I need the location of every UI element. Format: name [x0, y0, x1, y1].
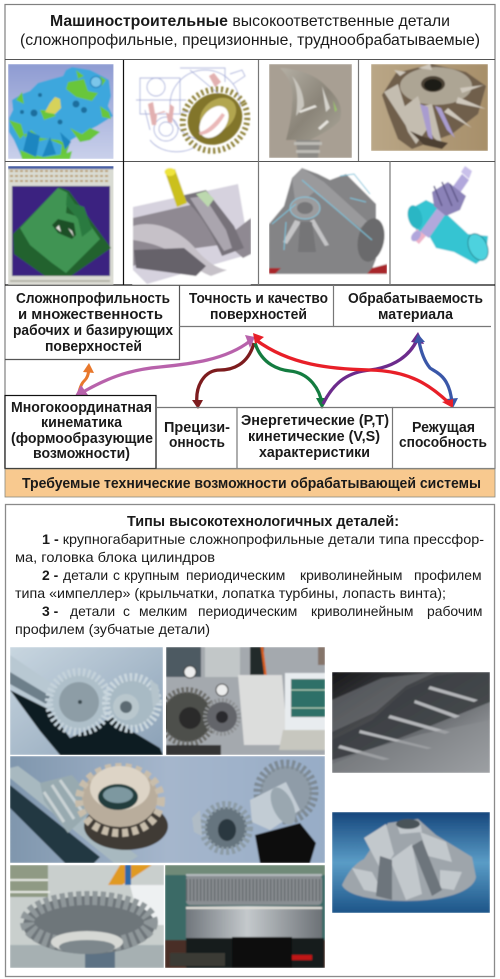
- text block: type descriptions: криволинейным: [300, 567, 402, 583]
- image: screw rotor with yellow tool: [132, 167, 251, 285]
- text box: machinability: [334, 291, 491, 326]
- text box: complex profile: Сложнопрофильность: [16, 291, 170, 307]
- arrow: dark red to precision: [192, 343, 254, 409]
- text block: type descriptions: мелким: [139, 603, 187, 619]
- image: worm gear model: [406, 166, 490, 265]
- heading: types: Типы высокотехнологичных деталей:: [127, 514, 399, 530]
- text box: multi-axis kinematics: возможности): [33, 446, 130, 462]
- text block: type descriptions: 2 -: [42, 567, 59, 583]
- text box: complex profile: рабочих и базирующих: [13, 323, 173, 339]
- photo: dark milling cutter: [332, 672, 490, 773]
- text box: energy and kinetic characteristics: Энергетические (P,T): [241, 413, 389, 429]
- panel: top frame: [5, 4, 495, 468]
- image: turbine blade: [269, 64, 352, 158]
- arrow: purple to machinability: [323, 332, 424, 404]
- text box: energy and kinetic characteristics: характеристики: [259, 445, 370, 461]
- text box: cutting ability: Режущая: [412, 420, 475, 436]
- arrow: green to energy characteristics: [255, 343, 328, 409]
- panel: types of high-tech parts: [6, 504, 494, 976]
- title: [20, 13, 480, 49]
- text block: type descriptions: 1 - крупногабаритные сложнопрофильные детали типа прессфор-: [42, 531, 484, 547]
- text block: type descriptions: крупным: [124, 567, 179, 583]
- text box: precision: онность: [169, 435, 225, 451]
- arrow: blue to machinability: [414, 334, 458, 408]
- photo: meshing bevel gears: [10, 647, 163, 755]
- text block: type descriptions: периодическим: [186, 567, 285, 583]
- text box: multi-axis kinematics: [5, 396, 156, 468]
- text block: type descriptions: криволинейным: [311, 603, 413, 619]
- text block: type descriptions: с: [113, 567, 120, 583]
- text box: multi-axis kinematics: (формообразующие: [11, 431, 153, 447]
- arrow: pink double-headed: [75, 335, 255, 396]
- text box: energy and kinetic characteristics: кинетические (V,S): [248, 429, 380, 445]
- photo: large spiral bevel gear on crane: [10, 865, 164, 968]
- text block: type descriptions: профилем (зубчатые детали): [15, 621, 210, 637]
- text box: cutting ability: способность: [399, 435, 487, 451]
- title: Машиностроительные высокоответственные детали: [50, 13, 450, 30]
- text box: precision: Прецизи-: [164, 420, 230, 436]
- text box: machinability: Обрабатываемость: [348, 291, 483, 307]
- title: (сложнопрофильные, прецизионные, труднообрабатываемые): [20, 32, 480, 49]
- text box: machinability: материала: [378, 307, 454, 323]
- text box: accuracy and surface quality: поверхностей: [210, 307, 307, 323]
- orange banner: Требуемые технические возможности обрабатывающей системы: [22, 476, 481, 492]
- orange banner: [5, 469, 495, 497]
- image: green mould in CAM window: [8, 166, 114, 285]
- text block: type descriptions: детали: [70, 603, 115, 619]
- photo: gear inspection machine: [166, 647, 325, 755]
- text block: type descriptions: рабочим: [427, 603, 482, 619]
- text box: cutting ability: [392, 408, 495, 451]
- text block: type descriptions: [15, 531, 484, 637]
- image: blue-green cylinder head model: [8, 64, 114, 159]
- text box: precision: [156, 408, 237, 468]
- text block: type descriptions: периодическим: [198, 603, 297, 619]
- text box: multi-axis kinematics: Многокоординатная: [11, 400, 152, 416]
- text block: type descriptions: типа «импеллер» (крыльчатки, лопатка турбины, лопасть винта);: [15, 585, 446, 601]
- text box: energy and kinetic characteristics: [237, 408, 392, 468]
- arrow: red double-headed: [253, 333, 453, 408]
- arrow: orange: [79, 363, 94, 392]
- photo: worm and sprocket, bevel gears: [10, 756, 325, 863]
- text box: complex profile: [5, 285, 180, 360]
- text block: type descriptions: детали: [63, 567, 108, 583]
- text block: type descriptions: с: [123, 603, 130, 619]
- photo: impeller on blue: [332, 812, 490, 913]
- image: impeller on beige: [371, 64, 488, 151]
- photo: large helical gear on stand: [165, 865, 325, 968]
- text block: type descriptions: профилем: [414, 567, 482, 583]
- text box: complex profile: и множественность: [18, 307, 163, 323]
- text box: multi-axis kinematics: кинематика: [41, 415, 123, 431]
- image: gear drawing: [136, 66, 251, 155]
- text box: accuracy and surface quality: Точность и качество: [189, 291, 328, 307]
- text box: accuracy and surface quality: [180, 285, 334, 326]
- text box: complex profile: поверхностей: [45, 339, 142, 355]
- text block: type descriptions: 3 -: [42, 603, 59, 619]
- text block: type descriptions: ма, головка блока цилиндров: [15, 549, 215, 565]
- image: grey scanned engine block: [269, 168, 387, 275]
